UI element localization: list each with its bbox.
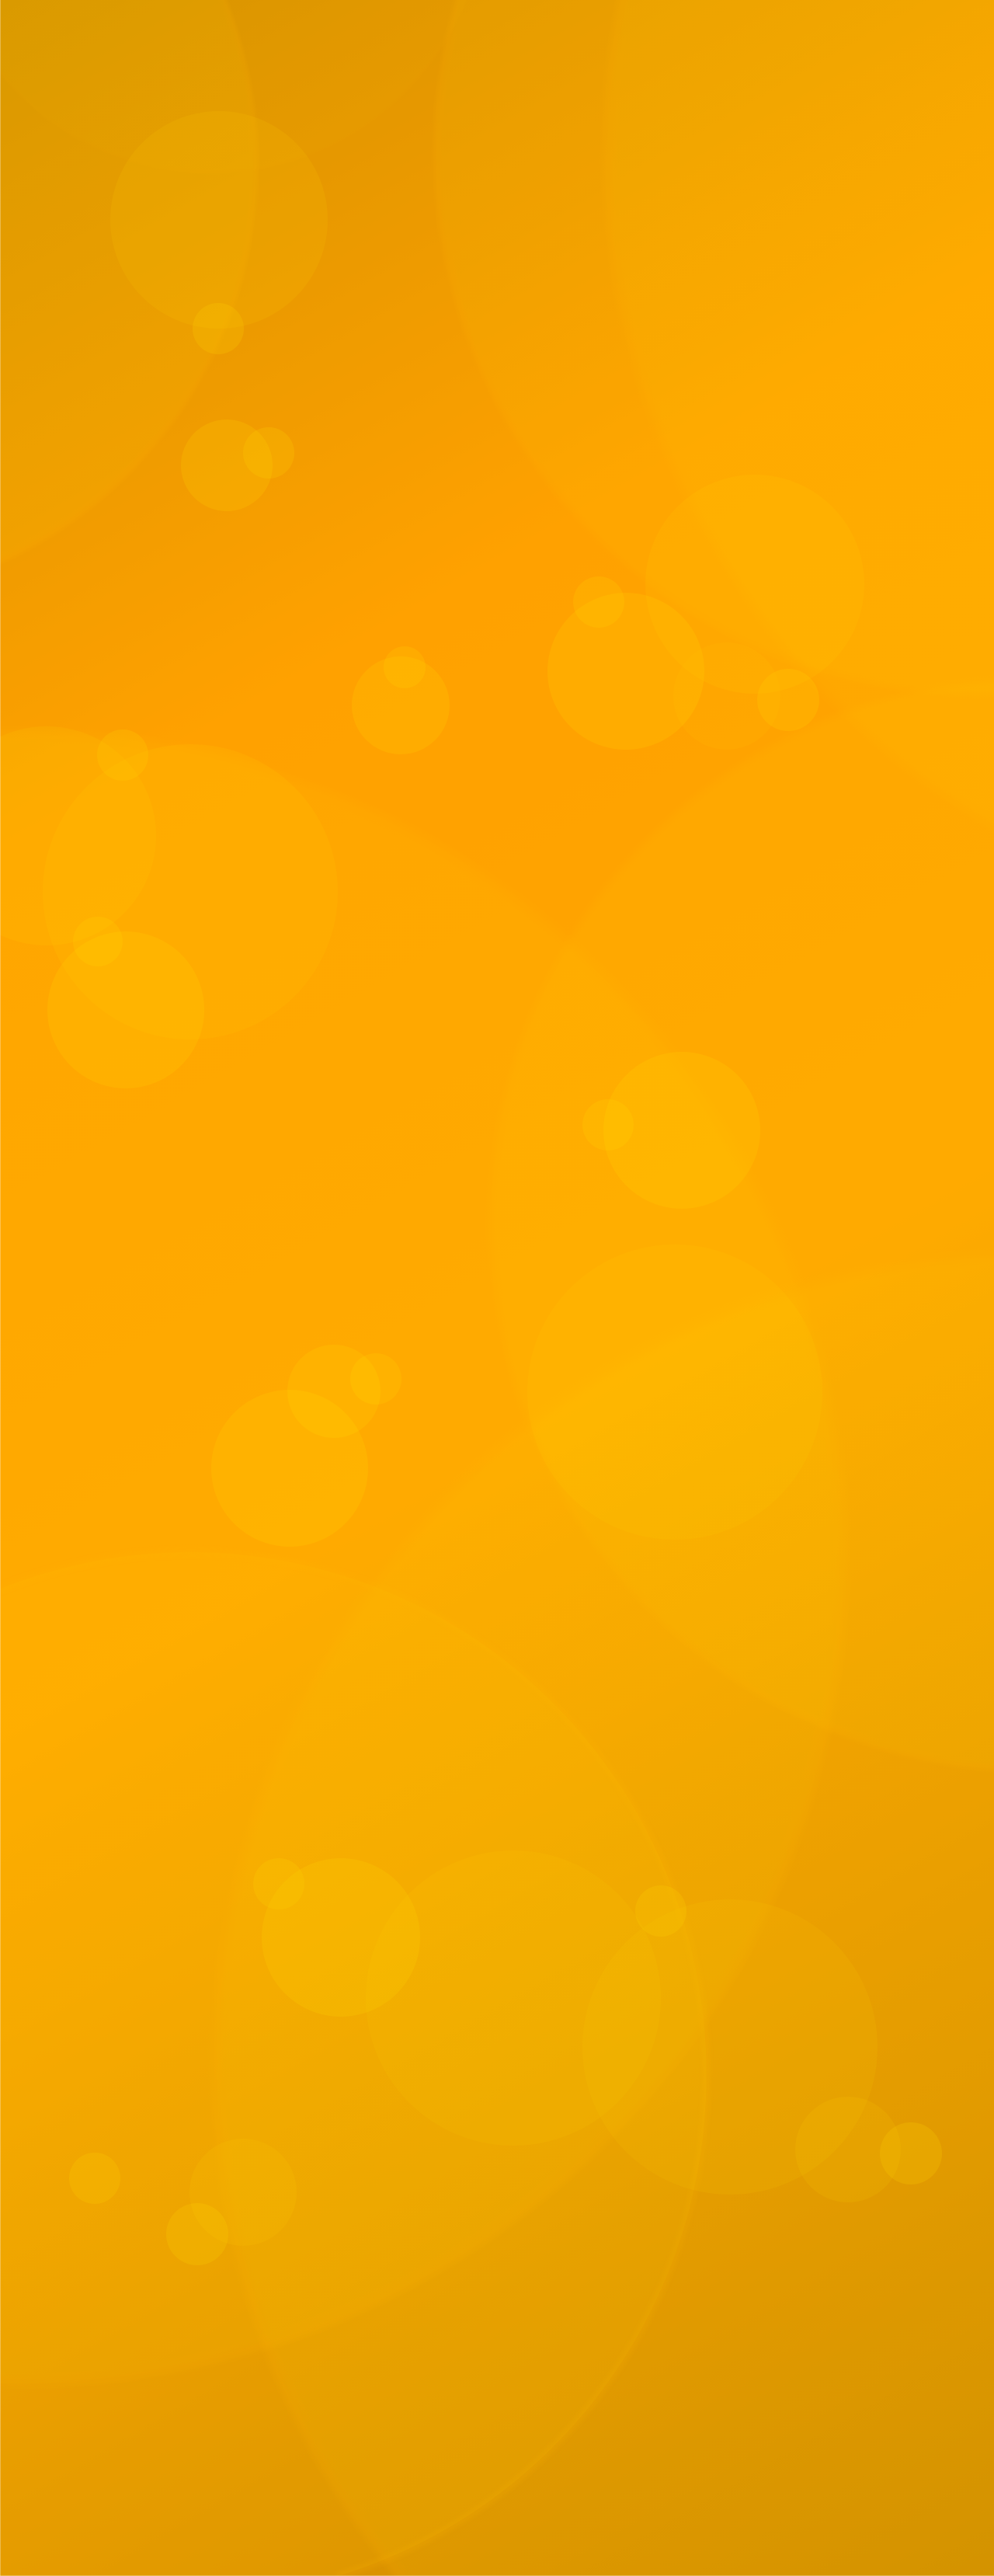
small bubbles — [47, 303, 942, 2265]
medium bubbles — [0, 111, 901, 2246]
